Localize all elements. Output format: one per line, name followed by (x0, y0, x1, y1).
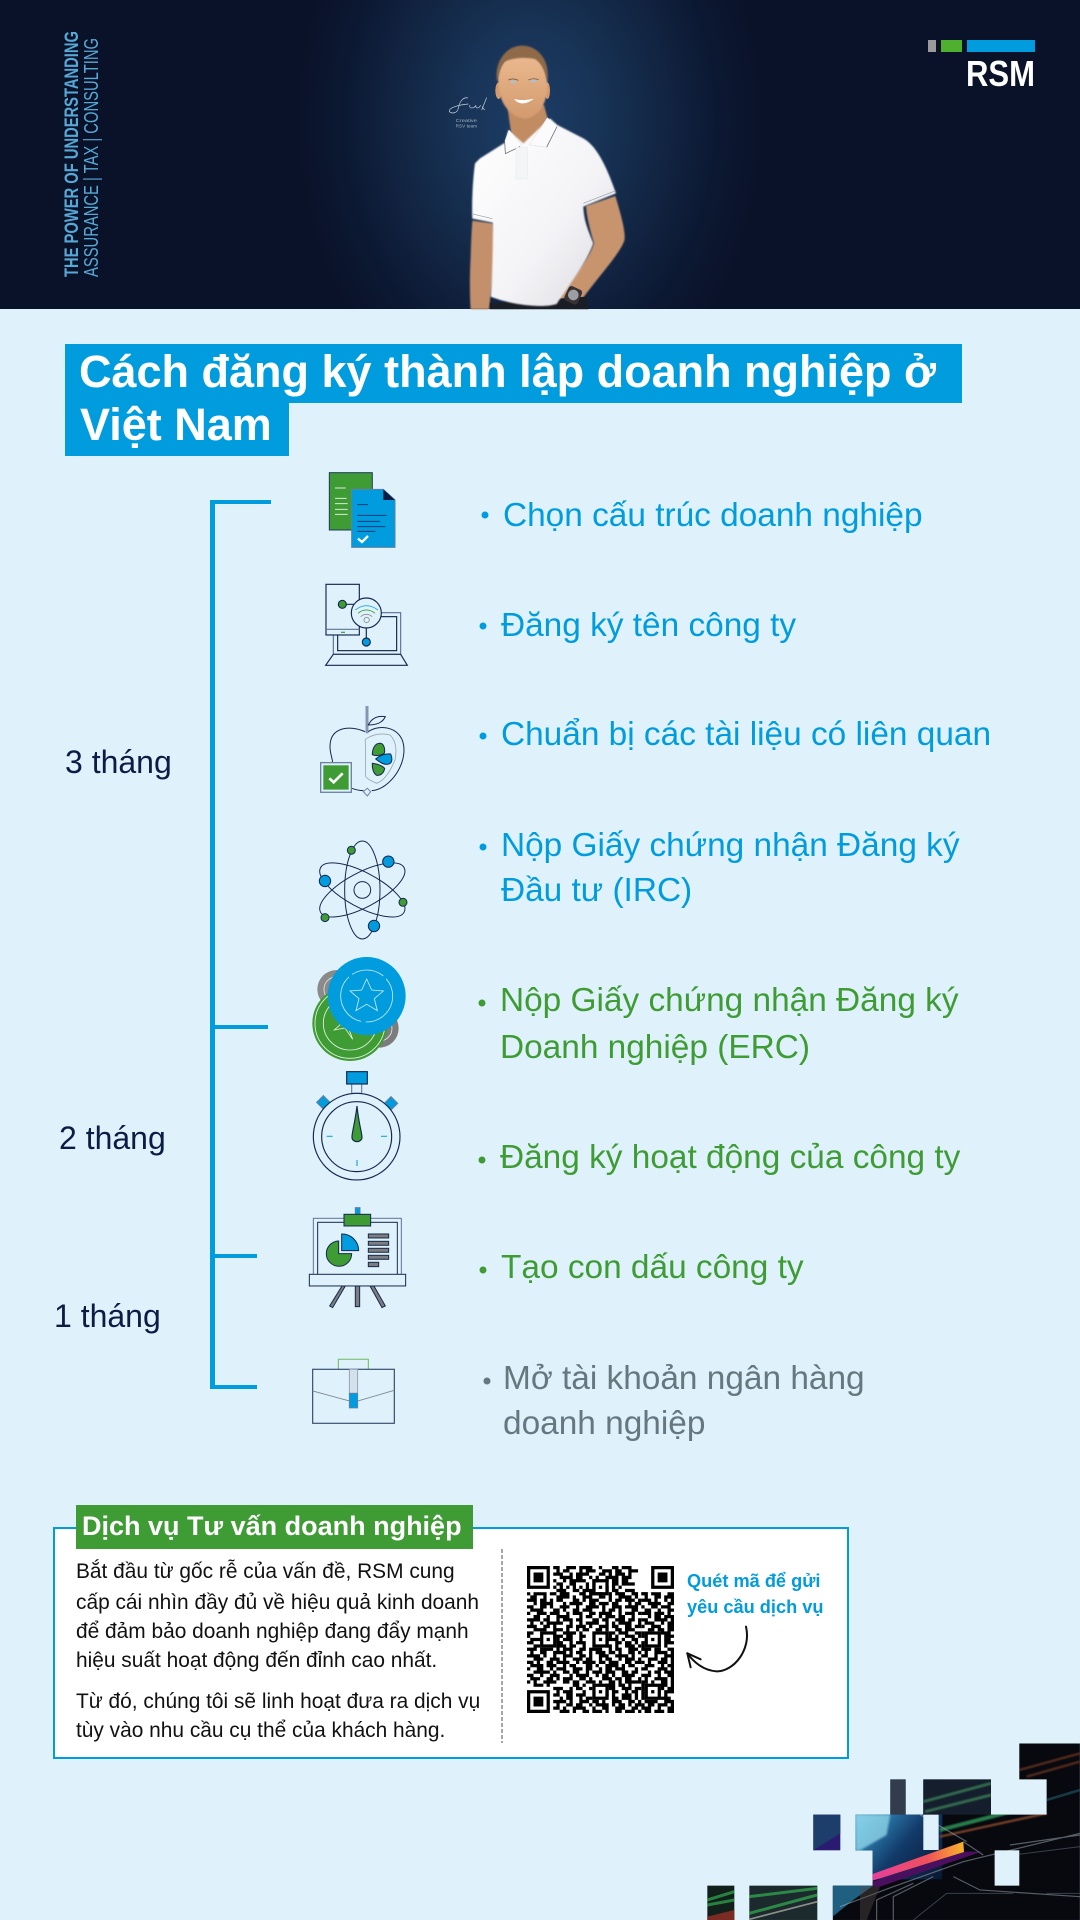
icon: briefcase (313, 1359, 394, 1423)
pants (490, 297, 589, 309)
eyes and smile (508, 79, 539, 80)
shirt (472, 118, 616, 306)
right arm (555, 196, 625, 307)
neck (508, 105, 550, 147)
photo: man in white polo (470, 46, 625, 309)
title (65, 344, 962, 456)
duration label: 2 tháng: 2 tháng (59, 1120, 166, 1156)
ears (495, 82, 502, 99)
step 4: Nộp Giấy chứng nhận Đăng ký (501, 827, 960, 864)
signature (449, 98, 487, 129)
signature: Creative (456, 118, 478, 123)
panel body text (76, 1560, 480, 1742)
hair (497, 46, 548, 82)
QR caption: yêu cầu dịch vụ (687, 1597, 823, 1617)
RSM logo: RSM (966, 53, 1035, 94)
step 2: Đăng ký tên công ty (501, 607, 796, 644)
header banner (0, 0, 1080, 309)
step 7: Tạo con dấu công ty (501, 1249, 804, 1286)
duration label: 1 tháng: 1 tháng (54, 1298, 161, 1334)
QR code (527, 1566, 674, 1713)
step 5: Nộp Giấy chứng nhận Đăng ký (500, 982, 959, 1019)
panel body text: để đảm bảo doanh nghiệp đang đẩy mạnh (76, 1620, 469, 1643)
step 6: Đăng ký hoạt động của công ty (500, 1139, 961, 1176)
step 4: Đầu tư (IRC) (501, 872, 692, 909)
step 1: Chọn cấu trúc doanh nghiệp (503, 497, 923, 534)
QR caption (687, 1571, 823, 1617)
panel body text: hiệu suất hoạt động đến đỉnh cao nhất. (76, 1649, 437, 1672)
sleeve hems (473, 191, 615, 219)
arrow to QR code (687, 1627, 747, 1671)
panel heading (76, 1505, 473, 1549)
left arm (470, 221, 495, 309)
panel body text: Bắt đầu từ gốc rễ của vấn đề, RSM cung (76, 1560, 455, 1583)
panel heading: Dịch vụ Tư vấn doanh nghiệp (82, 1511, 462, 1541)
icon: presentation board (309, 1208, 406, 1308)
icon: atom (312, 841, 412, 939)
vertical tagline (61, 31, 103, 277)
step 3: Chuẩn bị các tài liệu có liên quan (501, 716, 991, 753)
placket (516, 147, 527, 179)
step 4 (480, 827, 960, 909)
watch (563, 285, 583, 306)
step 8: doanh nghiệp (503, 1405, 705, 1442)
icon: stopwatch (313, 1072, 400, 1180)
step 8 (484, 1360, 865, 1442)
face (498, 53, 547, 119)
collar (505, 118, 557, 154)
panel body text: tùy vào nhu cầu cụ thể của khách hàng. (76, 1719, 445, 1742)
panel body text: Từ đó, chúng tôi sẽ linh hoạt đưa ra dịch vụ (76, 1690, 480, 1713)
icon: documents (329, 473, 395, 547)
RSM logo (928, 40, 1035, 94)
title: Cách đăng ký thành lập doanh nghiệp ở (79, 346, 936, 397)
duration label: 3 tháng: 3 tháng (65, 744, 172, 780)
QR caption: Quét mã để gửi (687, 1571, 820, 1591)
decorative tech image blocks (707, 1743, 1080, 1920)
step 8: Mở tài khoản ngân hàng (503, 1360, 865, 1397)
signature: RSV team (456, 124, 477, 129)
title: Việt Nam (80, 399, 272, 450)
icon: apple with checkbox (321, 706, 404, 796)
panel: consulting service (54, 1505, 848, 1758)
panel body text: cấp cái nhìn đầy đủ về hiệu quả kinh doanh (76, 1591, 479, 1614)
icon: devices with wifi (326, 584, 407, 665)
timeline bracket (210, 500, 271, 1389)
step 5 (478, 982, 959, 1066)
icon: award badges (312, 957, 406, 1061)
step 5: Doanh nghiệp (ERC) (500, 1029, 810, 1066)
